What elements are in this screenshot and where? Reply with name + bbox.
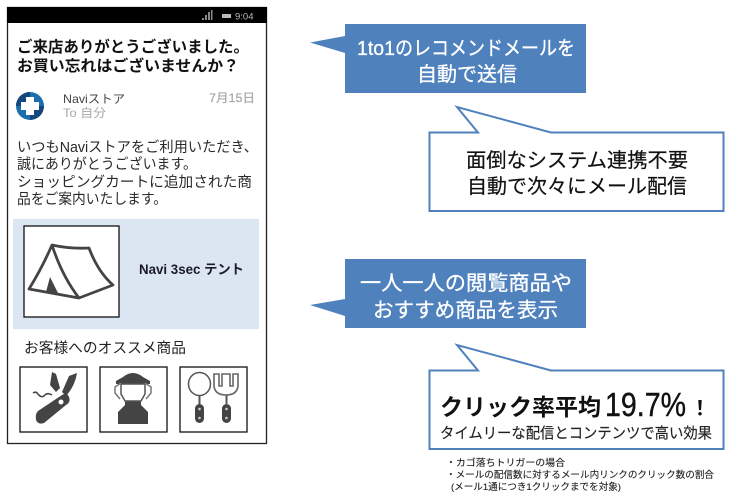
footnotes: ・カゴ落ちトリガーの場合 (446, 457, 566, 469)
icon: store logo (16, 92, 44, 120)
panel: phone email mockup (7, 7, 267, 444)
callout: automatic recommendation mail: 1to1 (357, 38, 395, 60)
email body text: ショッピングカートに追加された商 (17, 174, 252, 191)
email subject heading (17, 37, 249, 75)
icon: tent (24, 226, 119, 317)
click rate headline (440, 386, 710, 423)
click rate headline: ！ (690, 398, 710, 420)
callout: no system integration: 面倒なシステム連携不要 (466, 149, 688, 172)
email body text: 誠にありがとうございます。 (17, 155, 197, 173)
callout: browsed and recommended products: おすすめ商品を表示 (373, 299, 558, 322)
callout: automatic recommendation mail (310, 24, 586, 93)
status bar: 9:04 (235, 12, 254, 22)
panel: featured product (13, 219, 259, 329)
callout: automatic recommendation mail: のレコメンドメールを (395, 38, 575, 60)
icon: multi-tool knife (20, 367, 87, 432)
click rate headline: クリック率平均 (440, 394, 601, 420)
callout: click rate (430, 345, 724, 449)
status bar (7, 7, 267, 23)
footnotes: (メール1通につき1クリックまでを対象) (451, 481, 621, 493)
callout: no system integration (430, 107, 724, 211)
sender details: Naviストア (63, 92, 125, 106)
icon: spoon and fork (180, 367, 247, 432)
sender details (63, 91, 255, 120)
icon: lantern (100, 367, 167, 432)
sender details: To 自分 (63, 106, 106, 120)
click rate headline: 19.7% (605, 386, 686, 423)
recommended heading: お客様へのオススメ商品 (24, 340, 186, 357)
callout: browsed and recommended products (310, 259, 586, 328)
footnotes: ・メールの配信数に対するメール内リンクのクリック数の割合 (446, 469, 714, 481)
email body text (17, 139, 258, 208)
callout: no system integration: 自動で次々にメール配信 (467, 175, 687, 198)
email body text: 品をご案内いたします。 (17, 191, 167, 208)
email subject heading: お買い忘れはございませんか？ (17, 56, 239, 75)
click rate subtext: タイムリーな配信とコンテンツで高い効果 (440, 425, 712, 442)
footnotes (446, 457, 714, 493)
email body text: いつもNaviストアをご利用いただき、 (17, 139, 258, 156)
email subject heading: ご来店ありがとうございました。 (17, 37, 249, 56)
sender details: 7月15日 (209, 91, 255, 105)
callout: automatic recommendation mail: 自動で送信 (417, 63, 517, 86)
callout: browsed and recommended products: 一人一人の閲覧商品や (360, 272, 572, 295)
product name: Navi 3sec テント (139, 262, 244, 277)
